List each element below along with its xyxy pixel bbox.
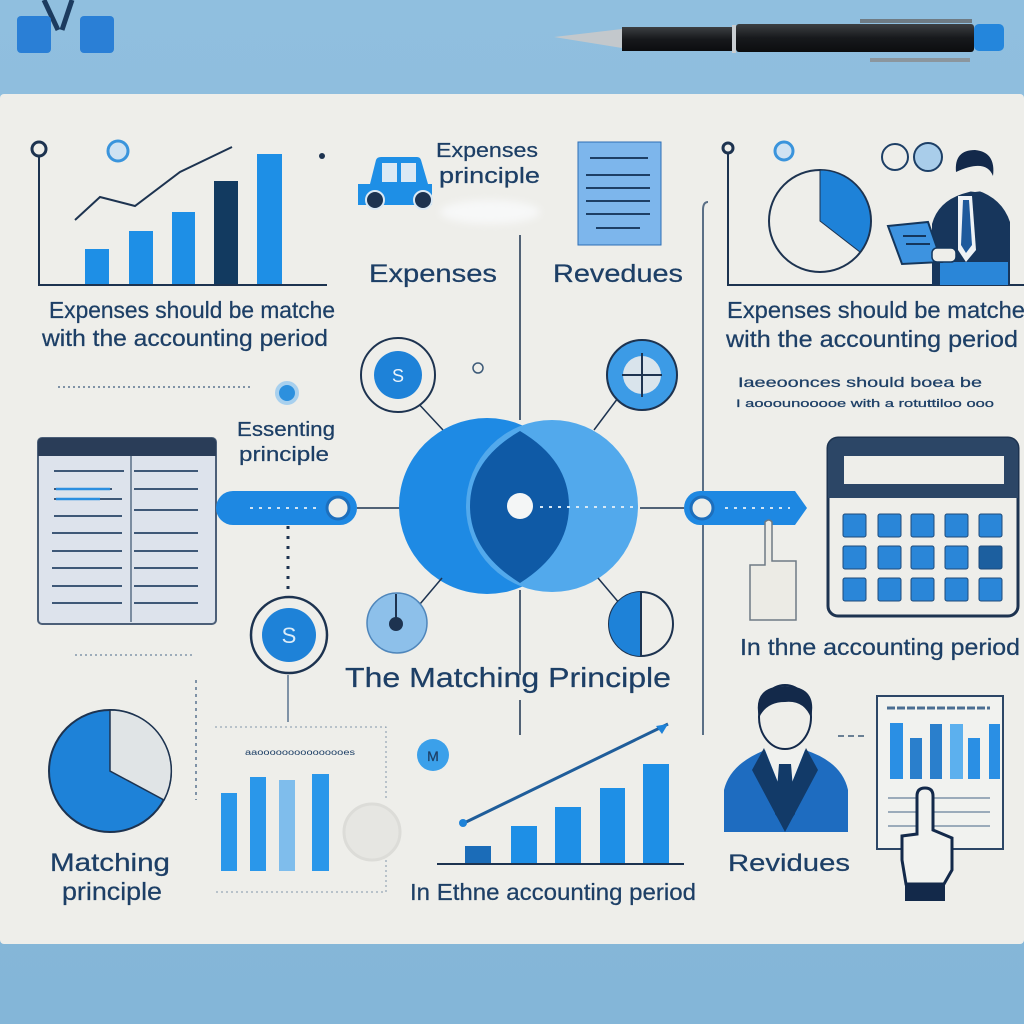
- chart: bottom-center rising bars: M: [427, 748, 439, 764]
- connector: small dash: [838, 735, 866, 737]
- text: top-left caption: [41, 297, 335, 351]
- text: top-left caption: Expenses should be matche: [49, 297, 335, 323]
- text: expenting principle: Essenting: [237, 419, 335, 441]
- chart: bottom-middle small bars: [221, 748, 400, 871]
- text: in the accounting period: In thne accounting period: [740, 634, 1020, 660]
- text: small blurred note: I aooounooooe with a rotuttiloo ooo: [736, 398, 994, 410]
- venn diagram: [399, 418, 638, 594]
- icon: ring s left: [361, 338, 443, 430]
- vertical bracket: [703, 202, 708, 735]
- icon: crosshair circle: [594, 340, 677, 430]
- chart: top-left bar chart with trend: [32, 141, 327, 285]
- text: expenses principle: [436, 140, 540, 188]
- icon: pen: [554, 19, 1004, 62]
- connector: right blue tab: [684, 491, 807, 525]
- text: top-right caption: [725, 297, 1024, 352]
- chart: bottom-center rising bars: [417, 724, 684, 864]
- icon: pointing hand: [902, 788, 952, 901]
- icon: binder clips: [17, 0, 114, 53]
- icon: small location dot: [473, 363, 483, 373]
- icon: dollar ring: [251, 597, 327, 673]
- chart: report with bars: [877, 696, 1003, 849]
- text: expenting principle: [237, 419, 335, 466]
- icon: car: [358, 157, 432, 209]
- text: top-right caption: with the accounting period: [725, 326, 1018, 352]
- text: top-right caption: Expenses should be matche: [727, 297, 1024, 323]
- dotted rules: [58, 386, 250, 388]
- chart: bottom-middle small bars: aaooooooooooooooes: [245, 748, 355, 757]
- heading: revidues: Revidues: [728, 850, 850, 877]
- table: [38, 438, 216, 624]
- icon: pie bottom mini left: [367, 578, 442, 653]
- text: in the accounting period bottom: In Ethne accounting period: [410, 879, 696, 905]
- text: small blurred note: [736, 374, 994, 410]
- heading: revenues: Revedues: [553, 260, 683, 288]
- text: expenting principle: principle: [239, 444, 329, 466]
- icon: document: [578, 142, 661, 245]
- calculator: [828, 438, 1018, 616]
- text: matching principle: [50, 849, 170, 906]
- text: expenses principle: Expenses: [436, 140, 538, 162]
- text: expenses principle: principle: [439, 163, 540, 188]
- text: matching principle: principle: [62, 878, 162, 906]
- icon: pointing hand outline: [750, 520, 796, 620]
- chart: top-right pie with presenter: [723, 142, 1024, 285]
- center guide lines: [357, 235, 684, 735]
- text: matching principle: Matching: [50, 849, 170, 877]
- heading: expenses: Expenses: [369, 260, 497, 288]
- text: small blurred note: Iaeeoonces should boea be: [738, 374, 982, 390]
- icon: business person: [724, 685, 848, 832]
- icon: pie bottom mini right: [598, 578, 673, 656]
- icon: ring s left: S: [392, 366, 404, 386]
- heading: the matching principle: The Matching Principle: [345, 662, 671, 693]
- text: top-left caption: with the accounting period: [41, 325, 328, 351]
- icon: dollar ring: S: [282, 623, 296, 648]
- soft white smudge under expenses principle: [440, 200, 540, 224]
- connector: left blue tab: [216, 491, 357, 525]
- icon: presenter with tablet: [888, 150, 1010, 285]
- icon: blue ring: [277, 383, 297, 403]
- chart: bottom-left pie: [49, 710, 171, 832]
